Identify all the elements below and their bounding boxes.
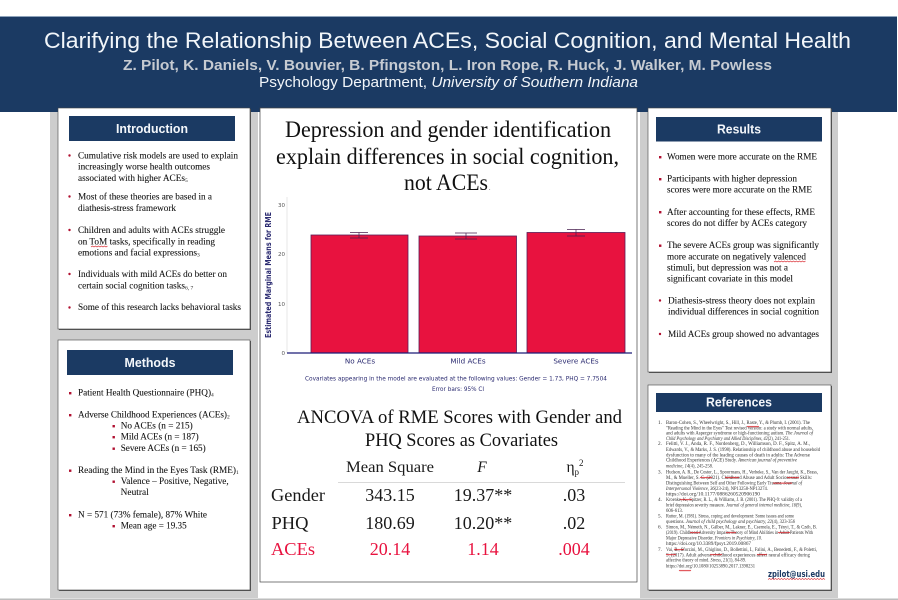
- introduction bullets: 6, 7: [185, 285, 194, 291]
- reference list: 5.: [658, 514, 662, 520]
- row: gender: .03: [563, 485, 585, 505]
- introduction bullets: on ToM tasks, specifically in reading: [78, 236, 215, 247]
- key finding heading: explain differences in social cognition,: [276, 144, 619, 169]
- table header: 2: [579, 458, 584, 468]
- introduction bullets: diathesis-stress framework: [78, 203, 176, 214]
- chart caption: [305, 376, 607, 393]
- reference list: Vai, B., Sforzini, M., Ghiglino, D., Bollettini, I., Falini, A., Benedetti, F., & Poletti,: [666, 546, 817, 553]
- methods bullets: Patient Health Questionnaire (PHQ): [78, 388, 211, 399]
- row: gender: 343.15: [365, 485, 415, 505]
- reference list: Felitti, V. J., Anda, R. F., Nordenberg, D., Williamson, D. F., Spitz, A. M.,: [666, 441, 810, 447]
- row: gender: [271, 485, 585, 505]
- results bullets: more accurate on negatively valenced: [667, 252, 806, 262]
- reference list: "Reading the Mind in the Eyes" Test revised version: a study with normal adults,: [666, 425, 813, 431]
- reference list: Baron-Cohen, S., Wheelwright, S., Hill, J., Raste, Y., & Plumb, I. (2001). The: [666, 419, 811, 426]
- table header: Mean Square: [346, 459, 434, 476]
- row: gender: 19.37**: [454, 485, 512, 505]
- reference list: 4.: [658, 497, 662, 503]
- title: Clarifying the Relationship Between ACEs, Social Cognition, and Mental Health: [44, 28, 851, 53]
- panel: center findings: [260, 108, 637, 582]
- introduction bullets: increasingly worse health outcomes: [78, 163, 210, 173]
- table header: p: [575, 467, 580, 477]
- reference list: and adults with Asperger syndrome or high-functioning autism. The Journal of: [666, 430, 814, 437]
- reference list: https://doi.org/10.1177/0886260520906190: [666, 492, 760, 498]
- methods bullets: Reading the Mind in the Eyes Task (RME): [78, 465, 236, 476]
- table title: PHQ Scores as Covariates: [365, 431, 558, 451]
- reference list: M., & Mueller, S. C. (2021). Childhood Abuse and Adult Sociosexual Skills:: [666, 474, 813, 481]
- methods bullets: [69, 388, 239, 532]
- introduction bullets: certain social cognition tasks: [78, 281, 185, 291]
- x axis labels: [345, 356, 599, 366]
- results bullets: stimuli, but depression was not a: [667, 264, 788, 274]
- reference list: https://doi.org/10.3389/fpsyt.2019.00867: [666, 540, 751, 547]
- y axis ticks: 30: [278, 203, 285, 209]
- results bullets: Participants with higher depression: [667, 175, 797, 185]
- results bullets: scores were more accurate on the RME: [667, 186, 812, 196]
- reference list: [658, 419, 820, 571]
- bar chart: estimated marginal means: [264, 197, 632, 393]
- table title: ANCOVA of RME Scores with Gender and: [297, 408, 623, 428]
- table header: [346, 458, 584, 477]
- heading: methods: Methods: [124, 355, 176, 370]
- methods bullets: 4: [211, 393, 214, 399]
- methods bullets: Neutral: [121, 488, 149, 498]
- row: PHQ: PHQ: [272, 513, 308, 533]
- key finding heading: [276, 117, 619, 195]
- reference list: 2.: [658, 441, 662, 447]
- reference list: S. (2017). Adult adverse childhood experiences affect neural efficacy during: [666, 551, 810, 558]
- results bullets: Diathesis-stress theory does not explain: [668, 297, 815, 307]
- reference list: affective theory of mind. Stress, 21(1), 84-89.: [666, 557, 746, 564]
- heading: results: [656, 117, 822, 142]
- y axis ticks: 10: [278, 302, 285, 308]
- reference list: Simon, M., Németh, N., Gálber, M., Lakner, E., Csernela, E., Tényi, T., & Czéh, B.: [666, 525, 817, 531]
- heading: methods: [67, 350, 233, 375]
- reference list: Major Depressive Disorder. Frontiers in Psychiatry, 10.: [666, 536, 762, 542]
- key finding heading: not ACEs: [404, 170, 488, 195]
- error bars: [350, 230, 585, 239]
- methods bullets: Valence – Positive, Negative,: [121, 477, 229, 487]
- x axis labels: Severe ACEs: [553, 356, 599, 366]
- reference list: Childhood Experiences (ACE) Study. American journal of preventive: [666, 457, 798, 464]
- row: ACEs: 20.14: [370, 539, 410, 559]
- header banner: [0, 16, 897, 112]
- y axis title: Estimated Marginal Means for RME: [264, 212, 273, 338]
- authors: Z. Pilot, K. Daniels, V. Bouvier, B. Pfingston, L. Iron Rope, R. Huck, J. Walker, M. Powless: [123, 57, 772, 74]
- introduction bullets: Cumulative risk models are used to explain: [78, 152, 238, 162]
- results bullets: individual differences in social cognition: [668, 307, 819, 318]
- reference list: medicine, 14(4), 245-258.: [666, 462, 713, 469]
- reference list: Interpersonal Violence, 36(23-24), NP13258-NP13274.: [665, 485, 768, 492]
- row: PHQ: [272, 513, 585, 533]
- results bullets: The severe ACEs group was significantly: [667, 240, 819, 251]
- row: ACEs: [271, 539, 590, 559]
- panel: methods: [58, 340, 251, 591]
- reference list: 7.: [658, 547, 662, 553]
- panel: results: [648, 108, 832, 373]
- row: gender: Gender: [271, 485, 325, 505]
- introduction bullets: Some of this research lacks behavioral tasks: [78, 302, 241, 313]
- methods bullets: 1: [236, 470, 239, 476]
- table header: F: [476, 459, 487, 476]
- methods bullets: Mild ACEs (n = 187): [121, 432, 199, 443]
- reference list: dysfunction to many of the leading causes of death in adults: The Adverse: [666, 451, 811, 458]
- heading: results: Results: [717, 122, 761, 136]
- row: ACEs: 1.14: [467, 539, 499, 559]
- introduction bullets: Children and adults with ACEs struggle: [78, 226, 225, 236]
- x axis labels: Mild ACEs: [450, 356, 486, 366]
- results bullets: Women were more accurate on the RME: [667, 153, 817, 163]
- y axis ticks: 20: [278, 252, 285, 258]
- reference list: (2019). Childhood Adversity Impairs Theory of Mind Abilities in Adult Patients With: [666, 529, 813, 536]
- results bullets: Mild ACEs group showed no advantages: [668, 330, 819, 340]
- methods bullets: Mean age = 19.35: [121, 522, 187, 532]
- introduction bullets: [68, 152, 241, 313]
- heading: introduction: [69, 116, 235, 141]
- reference list: https://doi.org/10.1080/10253890.2017.1398231: [666, 563, 755, 569]
- key finding heading: .: [489, 186, 491, 192]
- reference list: 3.: [658, 469, 662, 475]
- bars: [311, 232, 625, 353]
- table title: [297, 408, 623, 451]
- methods bullets: Severe ACEs (n = 165): [121, 443, 206, 454]
- methods bullets: N = 571 (73% female), 87% White: [78, 510, 207, 521]
- reference list: 6.: [658, 525, 662, 531]
- ancova table: [271, 408, 625, 559]
- y axis ticks: 0: [282, 351, 286, 357]
- row: PHQ: 180.69: [365, 513, 415, 533]
- heading: references: [656, 393, 822, 412]
- reference list: questions. Journal of child psychology and psychiatry, 22(4), 323-356: [666, 518, 795, 525]
- reference list: Distinguishing Between Self and Other Following Early Trauma. Journal of: [666, 479, 803, 486]
- results bullets: [659, 153, 819, 340]
- row: ACEs: .004: [558, 539, 590, 559]
- panel: references: [648, 385, 832, 591]
- results bullets: scores do not differ by ACEs category: [667, 218, 807, 229]
- results bullets: significant covariate in this model: [667, 274, 793, 284]
- reference list: brief depression severity measure. Journal of general internal medicine, 16(9),: [666, 502, 802, 509]
- row: PHQ: 10.20**: [454, 513, 512, 533]
- reference list: Kroenke, K., Spitzer, R. L., & Williams, J. B. (2001). The PHQ-9: validity of a: [666, 496, 803, 503]
- reference list: Child Psychology and Psychiatry and Allied Disciplines, 42(2), 241-251.: [666, 435, 790, 442]
- chart caption: Error bars: 95% CI: [432, 387, 484, 393]
- reference list: Hudson, A. R., De Coster, L., Spoormans, H., Verbeke, S., Van der Jaught, K., Brass,: [666, 469, 818, 475]
- key finding heading: Depression and gender identification: [285, 117, 611, 142]
- y axis ticks: [278, 203, 286, 357]
- heading: introduction: Introduction: [116, 121, 188, 136]
- methods bullets: 2: [227, 415, 230, 421]
- reference list: 1.: [658, 420, 662, 426]
- reference list: Edwards, V., & Marks, J. S. (1998). Relationship of childhood abuse and household: [666, 446, 820, 453]
- introduction bullets: 3: [197, 253, 200, 259]
- heading: references: References: [706, 394, 772, 410]
- table header: η: [566, 459, 575, 476]
- affiliation: Psychology Department, University of Southern Indiana: [259, 74, 638, 91]
- introduction bullets: emotions and facial expressions: [78, 248, 197, 259]
- results bullets: After accounting for these effects, RME: [667, 207, 815, 218]
- methods bullets: Adverse Childhood Experiences (ACEs): [78, 410, 227, 421]
- chart caption: Covariates appearing in the model are evaluated at the following values: Gender = 1.73, PHQ = 7.7504: [305, 376, 607, 382]
- introduction bullets: 5: [185, 178, 188, 184]
- panel: introduction: [58, 108, 251, 330]
- introduction bullets: associated with higher ACEs: [78, 174, 185, 184]
- introduction bullets: Most of these theories are based in a: [78, 192, 212, 203]
- x axis labels: No ACEs: [345, 356, 375, 366]
- reference list: 606-613.: [666, 508, 683, 514]
- reference list: Rutter, M. (1981). Stress, coping and development: Some issues and some: [666, 513, 795, 520]
- introduction bullets: Individuals with mild ACEs do better on: [78, 270, 227, 280]
- row: ACEs: ACEs: [271, 539, 315, 559]
- row: PHQ: .02: [563, 513, 585, 533]
- methods bullets: No ACEs (n = 215): [121, 421, 193, 432]
- contact email: zpilot@usi.edu: [768, 570, 825, 580]
